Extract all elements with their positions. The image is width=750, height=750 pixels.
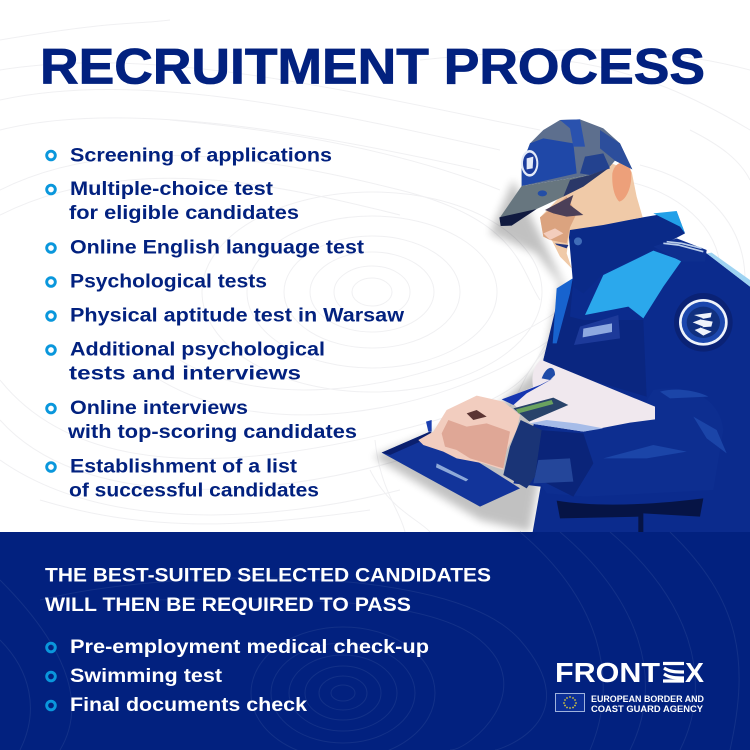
shoulder patch [674, 293, 733, 352]
requirement: swimming: Swimming test [70, 666, 223, 687]
step: list of candidates [47, 456, 319, 502]
logo: Frontex: X [685, 657, 704, 688]
final requirements list [47, 637, 429, 716]
name tag [574, 315, 620, 345]
recruitment steps list [47, 146, 404, 502]
cap [499, 119, 632, 226]
step: online interviews: Online interviews [70, 398, 248, 419]
step: online interviews: with top-scoring candidates [67, 422, 357, 443]
logo: wave E [663, 664, 684, 681]
title: RECRUITMENT PROCESS [40, 38, 705, 94]
requirement: medical: Pre-employment medical check-up [70, 637, 429, 658]
step: online interviews [47, 398, 357, 443]
agency name: COAST GUARD AGENCY [591, 704, 703, 714]
step: screening: Screening of applications [70, 146, 332, 166]
subheading: WILL THEN BE REQUIRED TO PASS [45, 594, 411, 616]
requirement: documents: Final documents check [70, 695, 307, 716]
neck and face [540, 163, 643, 268]
step: multiple-choice test [47, 179, 299, 224]
epaulette [653, 238, 707, 262]
step: multiple-choice test: for eligible candidates [69, 203, 299, 224]
illustration: border guard officer [373, 119, 750, 532]
jacket cuff [503, 420, 542, 488]
subheading [45, 564, 491, 616]
shoulder yoke [585, 251, 682, 318]
step: additional tests: Additional psychological [70, 340, 325, 360]
step: additional tests: tests and interviews [69, 364, 301, 384]
step: psychological tests: Psychological tests [70, 272, 267, 292]
logo: Frontex [555, 657, 704, 714]
clipboard [382, 420, 520, 507]
step: English test: Online English language test [70, 238, 365, 258]
EU flag [556, 694, 584, 712]
step: list of candidates: Establishment of a list [70, 456, 298, 478]
bottom panel [0, 532, 750, 750]
logo: Frontex: FRONT [555, 657, 660, 688]
notebook [502, 360, 655, 432]
figure shadow [373, 180, 570, 532]
step: multiple-choice test: Multiple-choice test [70, 179, 274, 200]
step: additional tests [47, 340, 325, 384]
step: physical test: Physical aptitude test in Warsaw [70, 306, 404, 326]
ear [612, 162, 631, 202]
agency name: EUROPEAN BORDER AND [591, 694, 704, 704]
subheading: THE BEST-SUITED SELECTED CANDIDATES [45, 564, 491, 586]
hand [418, 396, 520, 470]
jacket [513, 247, 750, 532]
collar [568, 212, 685, 293]
agency name [591, 694, 704, 714]
step: list of candidates: of successful candidates [69, 480, 319, 502]
